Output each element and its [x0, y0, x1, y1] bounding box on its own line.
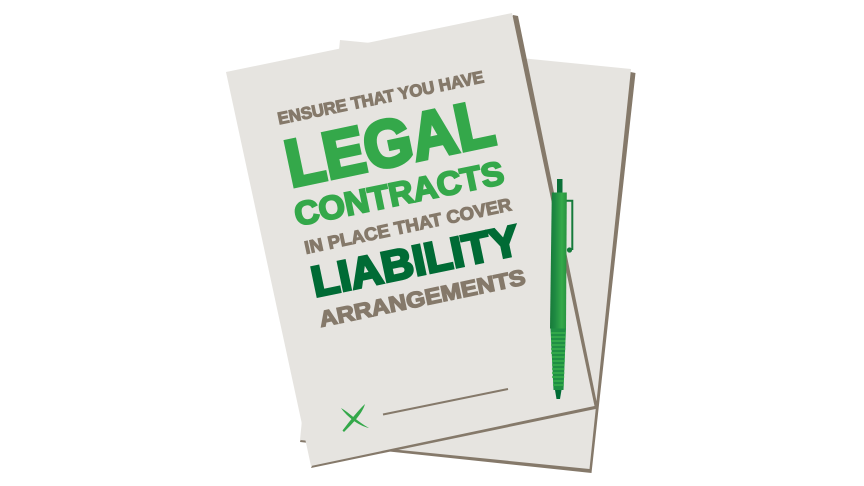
- pen clip: [563, 201, 572, 250]
- text: ensure that you have: ENSURE THAT YOU HAVE: [276, 68, 486, 128]
- pen body: [550, 192, 567, 328]
- back sheet of paper: [300, 40, 636, 473]
- signature line: [383, 389, 508, 414]
- pen tip: [555, 390, 562, 399]
- heading text: [276, 68, 528, 332]
- pen button: [557, 179, 562, 193]
- pen grip: [550, 328, 566, 390]
- icon: green signature X: [341, 404, 369, 432]
- text: contracts: CONTRACTS: [291, 154, 507, 233]
- icon: green pen: [550, 179, 572, 399]
- text: legal: LEGAL: [279, 85, 500, 201]
- text: arrangements: ARRANGEMENTS: [317, 264, 528, 332]
- text: in place that cover: IN PLACE THAT COVER: [303, 194, 513, 258]
- front sheet of paper: [226, 13, 598, 468]
- text: liability: LIABILITY: [307, 217, 524, 307]
